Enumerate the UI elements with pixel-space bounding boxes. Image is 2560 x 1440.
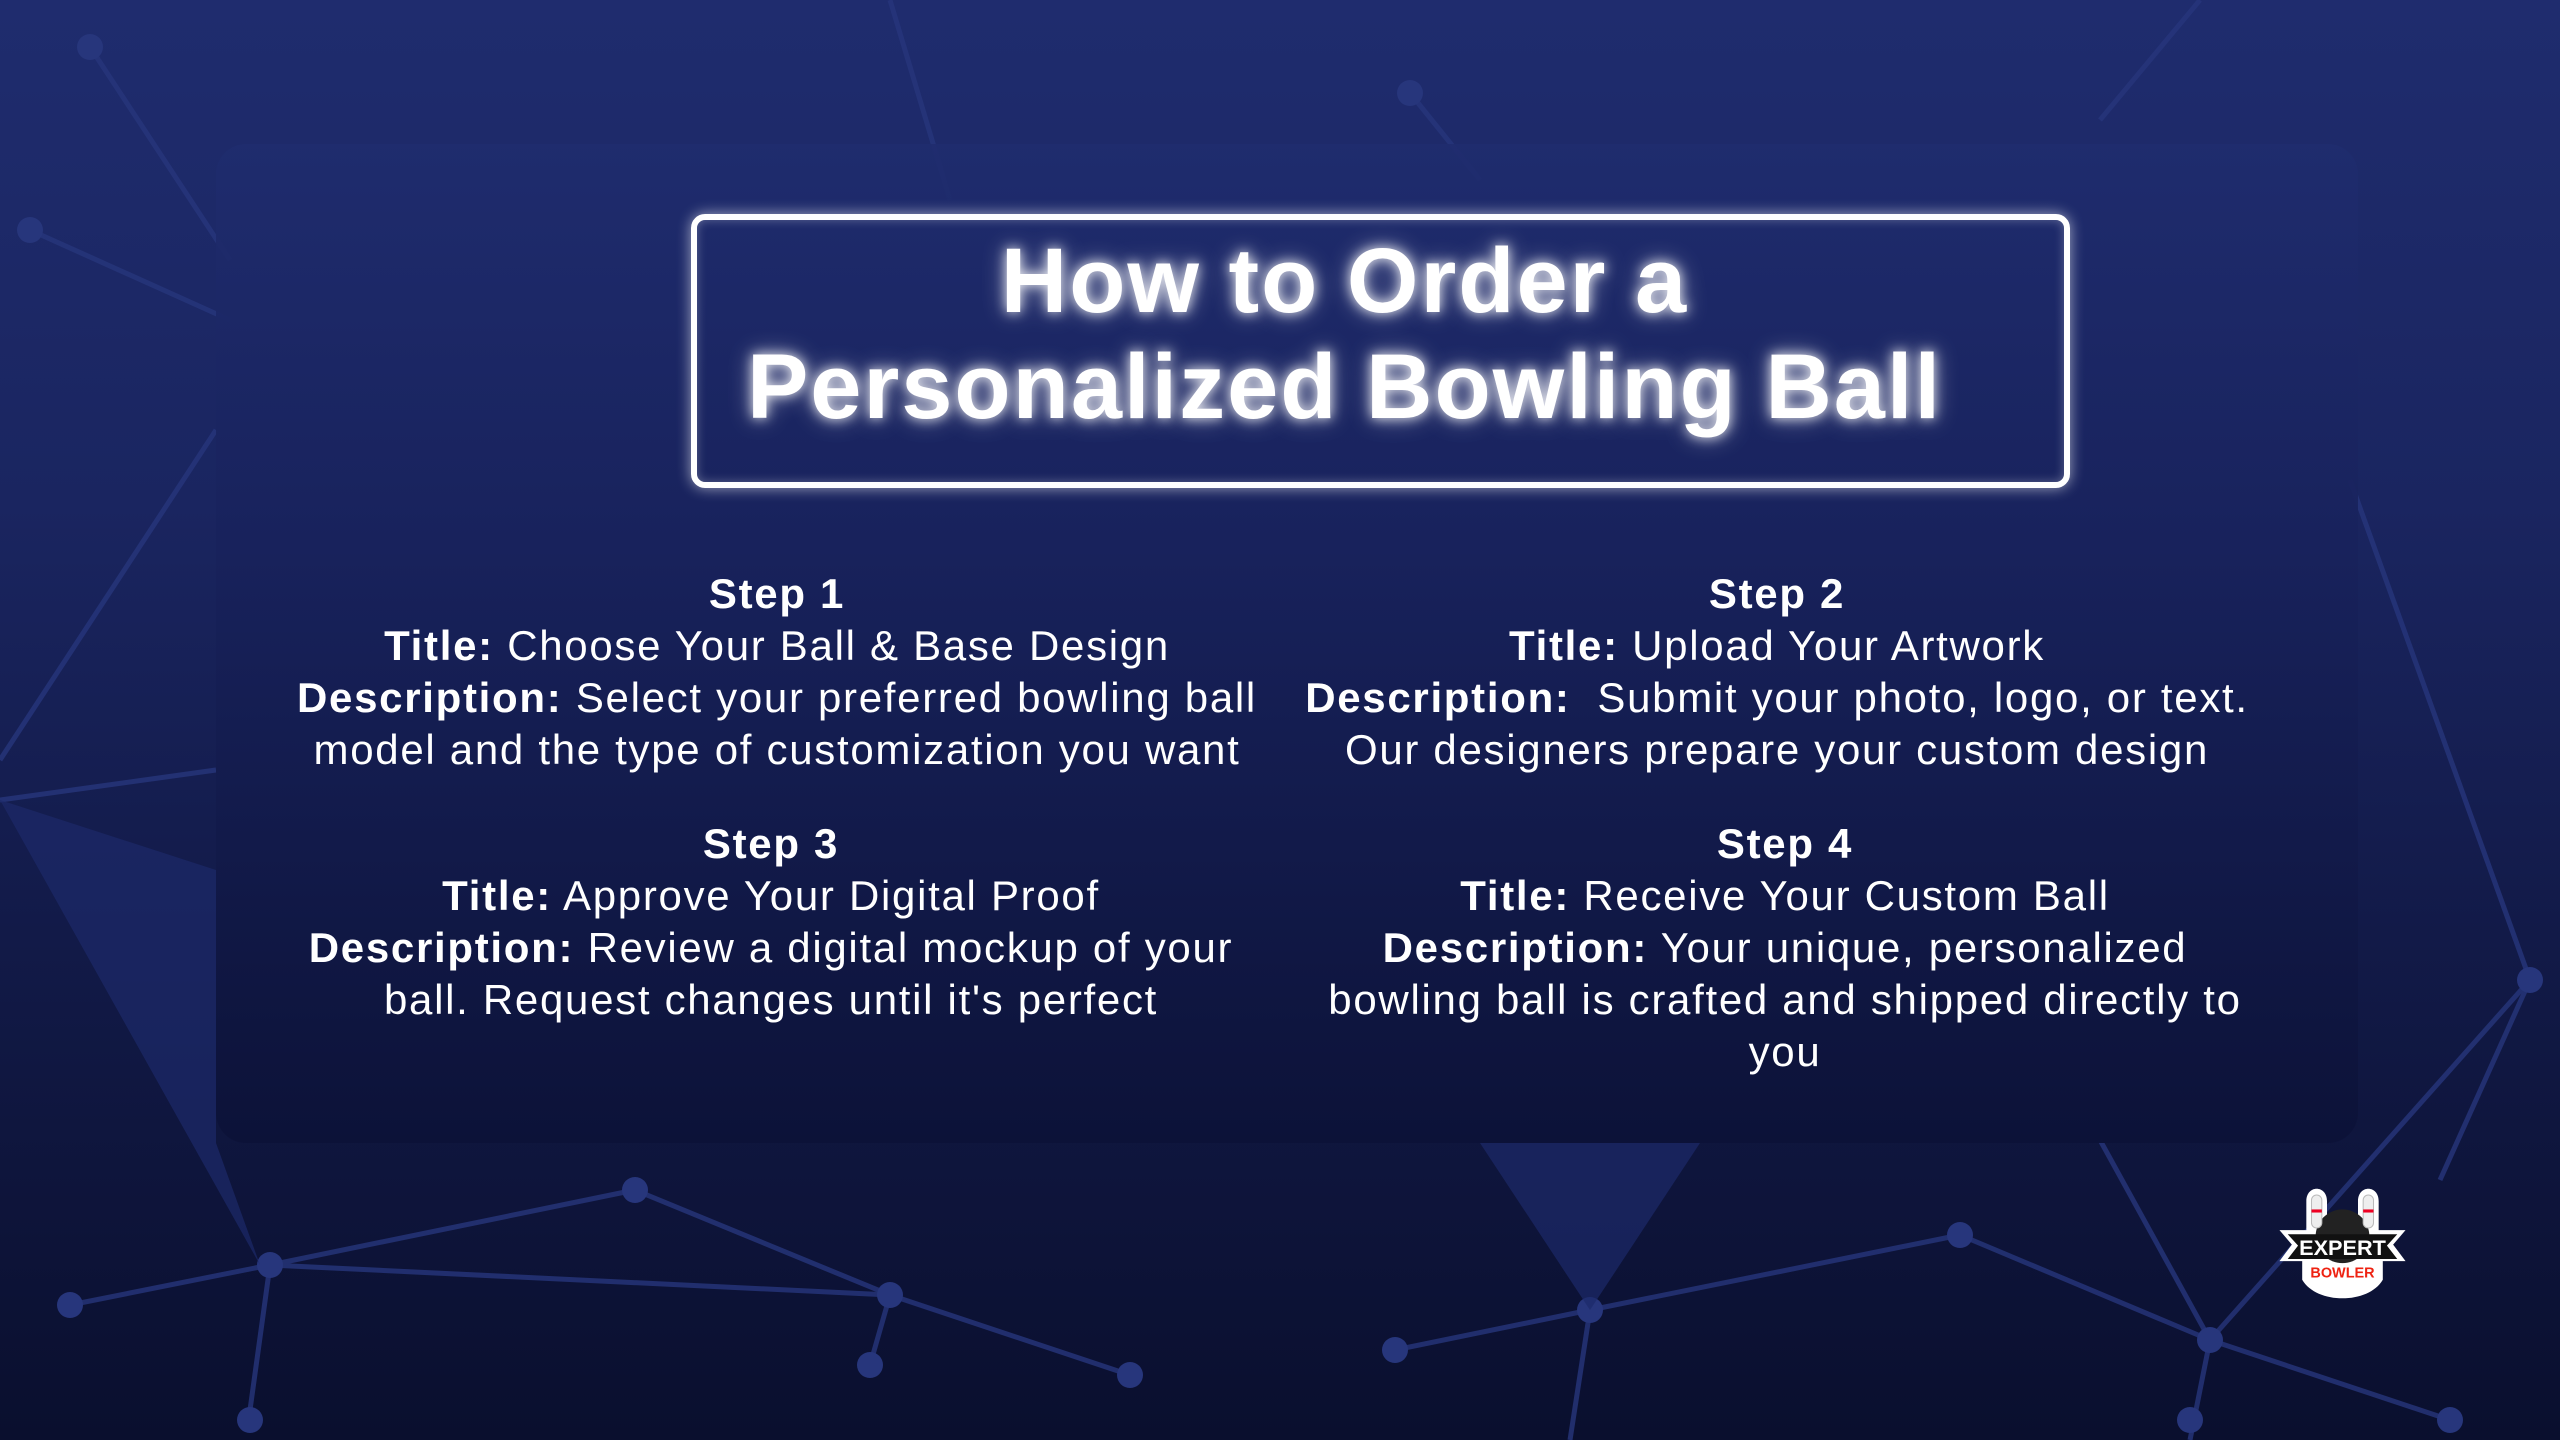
step 1: Description: Select your preferred bowling ball [297,674,1257,721]
step 3: Title: Approve Your Digital Proof [442,872,1100,919]
step 2: Our designers prepare your custom design [1345,726,2209,773]
main panel [216,144,2358,1143]
step 3: Step 3 [703,820,839,867]
step 4: Title: Receive Your Custom Ball [1460,872,2110,919]
step 3: ball. Request changes until it's perfect [384,976,1158,1023]
step 2: Step 2 [1709,570,1845,617]
step 4: you [1749,1028,1821,1075]
step 1: model and the type of customization you want [314,726,1240,773]
title: How to Order a [1001,230,1688,332]
step 2: Description: Submit your photo, logo, or text. [1305,674,2249,721]
step 4: Step 4 [1717,820,1853,867]
step 1 [297,570,1257,773]
step 2: Title: Upload Your Artwork [1509,622,2045,669]
step 4: bowling ball is crafted and shipped directly to [1328,976,2242,1023]
title box [691,214,2070,488]
logo: expert bowler [2280,1188,2406,1298]
step 1: Title: Choose Your Ball & Base Design [384,622,1170,669]
step 3: Description: Review a digital mockup of your [309,924,1233,971]
logo: expert bowler: BOWLER [2310,1266,2375,1282]
title: Personalized Bowling Ball [747,336,1942,438]
title [737,230,1950,452]
step 1: Step 1 [709,570,845,617]
step 4: Description: Your unique, personalized [1383,924,2187,971]
step 4 [1328,820,2242,1075]
step 3 [309,820,1233,1023]
step 2 [1305,570,2249,773]
logo: expert bowler: EXPERT [2299,1235,2387,1260]
